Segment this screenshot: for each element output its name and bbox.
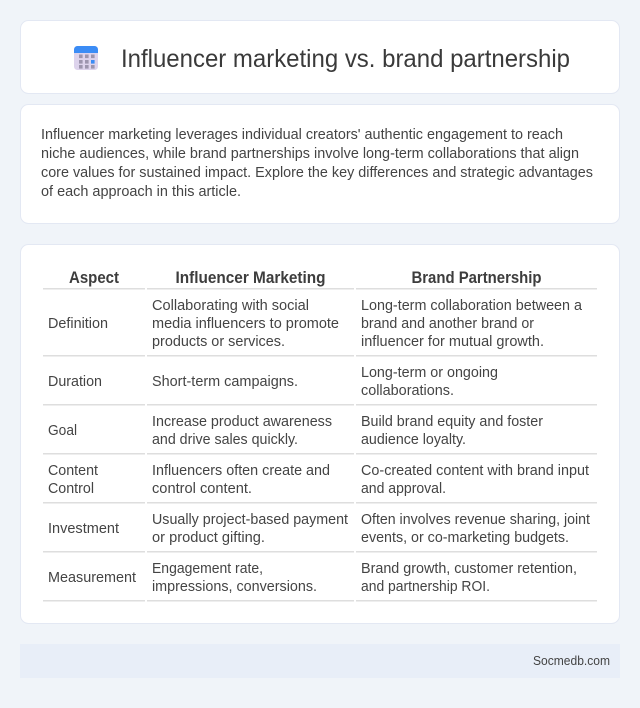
table row: duration (48, 365, 498, 399)
text block: introduction (41, 127, 593, 200)
table row: definition: Collaborating with social (152, 298, 309, 314)
table row: goal (48, 414, 543, 448)
table header row (69, 269, 542, 287)
table row: content control: control content. (152, 481, 252, 497)
table row: content control: Content (48, 463, 98, 479)
table header row: Influencer Marketing (176, 269, 326, 287)
table row: measurement (48, 561, 577, 595)
table row: content control: Co-created content with brand input (361, 463, 589, 479)
table header row: Brand Partnership (412, 269, 542, 287)
table row: measurement: Brand growth, customer retention, (361, 561, 577, 577)
table row: investment: events, or co-marketing budgets. (361, 530, 569, 546)
table row: investment: Investment (48, 521, 119, 537)
table row: content control: Control (48, 481, 94, 497)
table row: measurement: Engagement rate, (152, 561, 263, 577)
table row: goal: audience loyalty. (361, 432, 466, 448)
table row: investment: or product gifting. (152, 530, 265, 546)
table row: definition: Definition (48, 316, 108, 332)
panel: comparison table (20, 244, 620, 624)
panel: introduction (20, 104, 620, 224)
footer bar (20, 644, 620, 678)
table row: definition (48, 298, 583, 350)
table row: measurement: impressions, conversions. (152, 579, 317, 595)
table row: goal: and drive sales quickly. (152, 432, 298, 448)
table row: duration: collaborations. (361, 383, 454, 399)
table row: definition: media influencers to promote (152, 316, 339, 332)
table row: definition: influencer for mutual growth. (361, 334, 544, 350)
table row: investment: Often involves revenue sharing, joint (361, 512, 590, 528)
table row: duration: Long-term or ongoing (361, 365, 498, 381)
panel: title card (20, 20, 620, 94)
table row: measurement: and partnership ROI. (361, 579, 490, 595)
table row: goal: Build brand equity and foster (361, 414, 543, 430)
table row: investment (48, 512, 590, 546)
text block: introduction: core values for sustained impact. Explore the key differences and strategic advantages (41, 165, 593, 181)
footer text: Socmedb.com (533, 654, 610, 668)
table row: content control: Influencers often create and (152, 463, 330, 479)
table header row: Aspect (69, 269, 119, 287)
table row: definition: products or services. (152, 334, 285, 350)
text block: introduction: of each approach in this article. (41, 184, 241, 200)
table row: duration: Duration (48, 374, 102, 390)
table row: goal: Goal (48, 423, 77, 439)
table row: measurement: Measurement (48, 570, 136, 586)
table row: content control (48, 463, 589, 497)
table row: goal: Increase product awareness (152, 414, 332, 430)
table row: investment: Usually project-based payment (152, 512, 348, 528)
table row: definition: brand and another brand or (361, 316, 534, 332)
table row: content control: and approval. (361, 481, 446, 497)
icon: calendar (74, 46, 98, 70)
table row: duration: Short-term campaigns. (152, 374, 298, 390)
text block: introduction: Influencer marketing leverages individual creators' authentic engagement to reach (41, 127, 563, 143)
table row: definition: Long-term collaboration between a (361, 298, 583, 314)
text block: introduction: niche audiences, while brand partnerships involve long-term collaborations that align (41, 146, 579, 162)
title: Influencer marketing vs. brand partnership (121, 45, 570, 73)
